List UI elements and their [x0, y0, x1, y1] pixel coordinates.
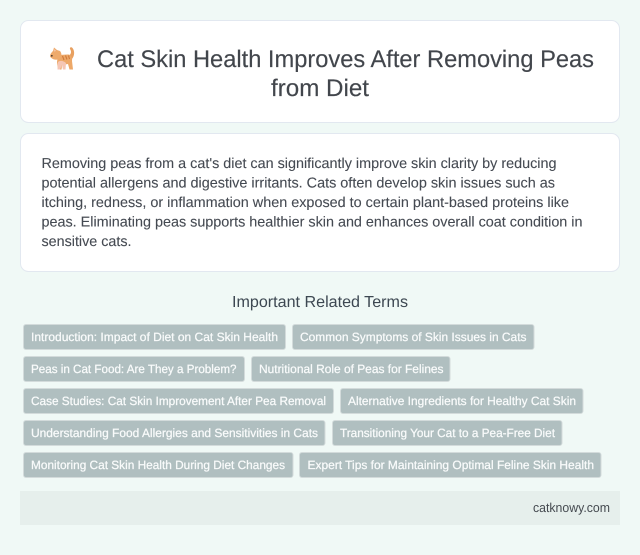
- footer bar: [20, 491, 620, 525]
- tag: monitoring: Monitoring Cat Skin Health During Diet Changes: [31, 458, 285, 472]
- panel: related term tags: [24, 324, 601, 478]
- title text: from Diet: [271, 75, 369, 102]
- description text: [42, 156, 582, 250]
- tag: peas in cat food: Peas in Cat Food: Are They a Problem?: [31, 362, 237, 376]
- tag: introduction: Introduction: Impact of Diet on Cat Skin Health: [31, 330, 278, 344]
- title text: [97, 46, 594, 102]
- title text: Cat Skin Health Improves After Removing Peas: [97, 46, 594, 73]
- panel: title card: [20, 20, 620, 122]
- tag: transitioning: Transitioning Your Cat to a Pea-Free Diet: [340, 426, 556, 440]
- tag: nutritional role: Nutritional Role of Peas for Felines: [259, 362, 444, 376]
- panel: description card: [20, 134, 620, 272]
- tag: expert tips: [300, 452, 601, 478]
- tag: expert tips: Expert Tips for Maintaining Optimal Feline Skin Health: [308, 458, 594, 472]
- heading: important related terms: Important Related Terms: [232, 294, 408, 311]
- tag: introduction: [24, 324, 286, 350]
- tag: transitioning: [332, 420, 562, 446]
- icon: cat: [50, 47, 74, 70]
- description text: sensitive cats.: [42, 234, 132, 250]
- tag: food allergies: Understanding Food Allergies and Sensitivities in Cats: [31, 426, 318, 440]
- footer text: catknowy.com: [533, 500, 610, 515]
- tag: case studies: Case Studies: Cat Skin Improvement After Pea Removal: [31, 394, 326, 408]
- tag: common symptoms: [292, 324, 534, 350]
- tag: peas in cat food: [24, 356, 244, 382]
- tag: monitoring: [24, 452, 293, 478]
- description text: itching, redness, or inflammation when exposed to certain plant-based proteins like: [42, 195, 569, 211]
- tag: common symptoms: Common Symptoms of Skin Issues in Cats: [300, 330, 526, 344]
- tag: case studies: [24, 388, 334, 414]
- description text: peas. Eliminating peas supports healthier skin and enhances overall coat condition in: [42, 214, 582, 230]
- description text: potential allergens and digestive irritants. Cats often develop skin issues such as: [42, 176, 555, 192]
- description text: Removing peas from a cat's diet can significantly improve skin clarity by reducing: [42, 156, 556, 172]
- tag: nutritional role: [252, 356, 450, 382]
- tag: alternative ingredients: Alternative Ingredients for Healthy Cat Skin: [348, 394, 576, 408]
- tag: alternative ingredients: [340, 388, 583, 414]
- tag: food allergies: [24, 420, 325, 446]
